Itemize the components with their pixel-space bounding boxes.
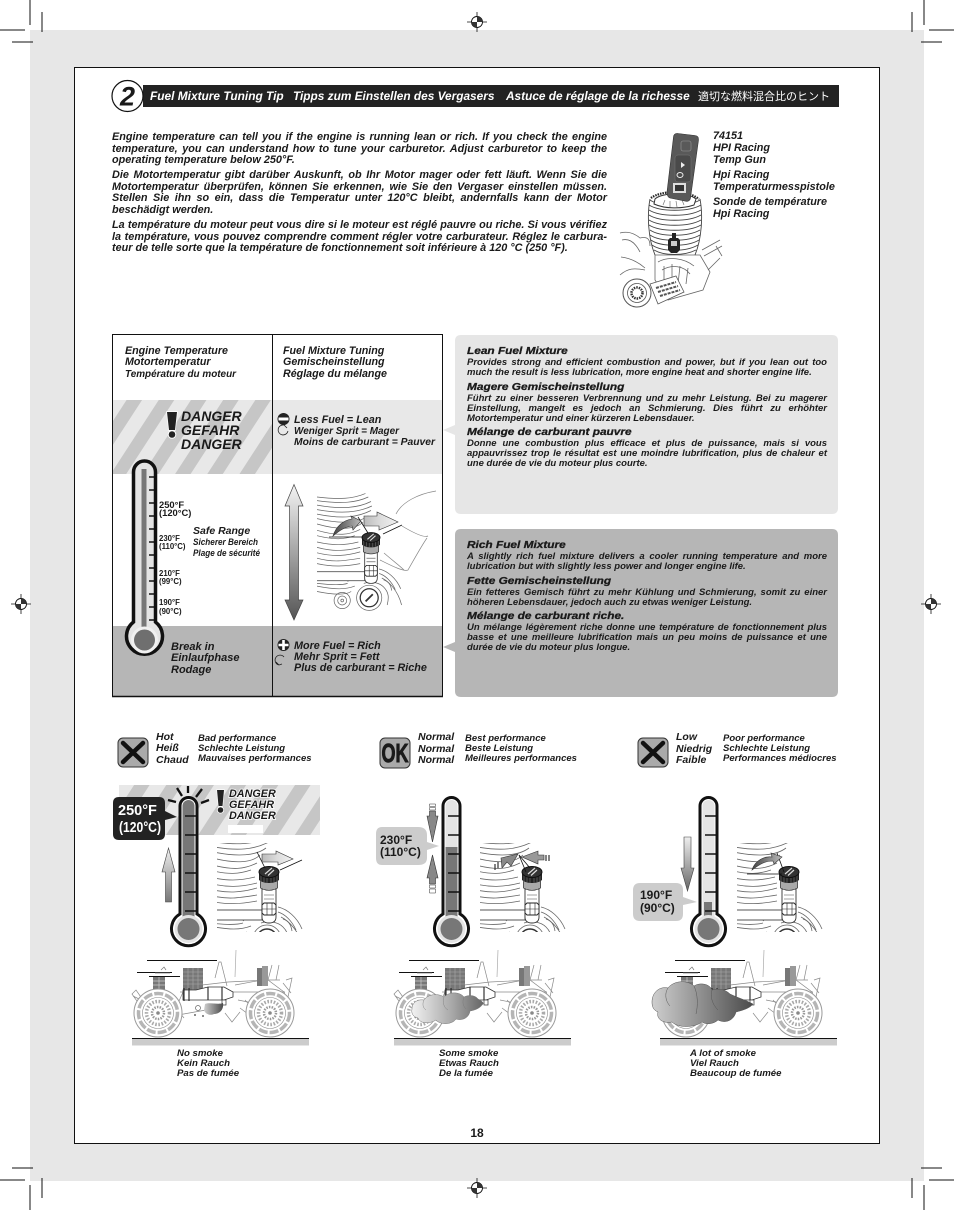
status: hot: Mauvaises performances [198,753,312,764]
smoke caption: none: No smoke [177,1048,224,1059]
temperature scale labels: 190°F [159,598,180,607]
temp gun caption: Hpi Racing [713,169,770,181]
lean text: English: Provides strong and efficient combustion and power, but if you lean out too [467,356,827,368]
status: hot: Hot [156,731,174,743]
temperature scale labels: 210°F [159,569,180,578]
danger warning: GEFAHR [181,422,240,438]
status: low: Schlechte Leistung [723,743,810,754]
carburettor hot [217,843,302,932]
status: low: Poor performance [723,733,806,744]
smoke caption: none [177,1048,240,1079]
temp gun caption [713,130,835,220]
status: hot [118,731,312,767]
status: low: Niedrig [676,743,713,755]
lean text: German: Magere Gemischeinstellung [467,382,624,393]
safe range label: Sicherer Bereich [193,537,258,548]
normal temperature callout [376,827,439,865]
lean text: German: Motortemperatur und einer kürzeren Lebensdauer. [467,412,695,424]
intro paragraph: English: Engine temperature can tell you if the engine is running lean or rich. If you check the engine [112,131,607,143]
low temperature callout [633,883,697,921]
temp gun caption: 74151 [713,130,743,142]
lean text: German [467,382,828,424]
lean text: French [467,427,828,468]
break-in label: Einlaufphase [171,652,239,664]
rich: plus icon and text: Mehr Sprit = Fett [294,651,380,663]
hot temperature callout [113,797,177,840]
danger warning: DANGER [181,436,243,452]
intro paragraph: German: Die Motortemperatur gibt darüber Auskunft, ob Ihr Motor mager oder fett läuft. Wenn Sie die [112,169,607,181]
tuning table [112,334,443,696]
status: normal: Beste Leistung [465,743,533,754]
intro paragraph: English: temperature, you can understand how to tune your carburetor. Adjust carburetor to keep the [112,143,607,155]
safe range label [193,525,261,559]
lean panel [443,335,838,514]
header bar: Fuel Mixture Tuning Tip [150,89,284,103]
smoke caption: lots [689,1048,782,1079]
danger warning [167,408,243,452]
status: low: Low [676,731,698,743]
break-in label: Break in [171,641,215,653]
rich text: English: Rich Fuel Mixture [467,540,566,551]
normal temperature callout: (110°C) [380,845,421,859]
intro paragraph: German: Stellen Sie ihn so ein, dass die Temperatur unter 120°C bleibt, andernfalls kann der Motor [112,192,607,204]
carburettor normal [480,843,566,932]
status: normal: Normal [418,731,455,743]
status: low: Performances médiocres [723,753,837,764]
hot temperature callout: 250°F [118,803,157,819]
rich: plus icon and text [275,639,427,674]
hot thermometer [168,786,209,946]
hot danger banner: DANGER [229,810,276,822]
lean text: French: appauvrissez trop le résultat est une moindre lubrification, plus de chaleur et [467,448,827,458]
lean text: French: une durée de vie du moteur plus courte. [467,458,648,468]
temperature scale labels: 250°F [159,499,184,510]
hot danger banner: GEFAHR [229,799,274,811]
table column heading: fuel mixture tuning: Réglage du mélange [283,368,387,380]
icon: cross [638,738,668,767]
truck: a lot of smoke [652,950,837,1046]
lean: minus icon and text: Moins de carburant = Pauver [294,436,436,448]
rich text: German: Fette Gemischeinstellung [467,576,611,587]
header bar: 適切な燃料混合比のヒント [698,89,830,103]
intro paragraph: French [112,219,607,254]
danger warning: DANGER [181,408,243,424]
lean text: English [467,346,827,378]
exhaust puff [204,1003,223,1015]
hot danger banner [119,785,320,835]
temp gun caption: Hpi Racing [713,208,770,220]
table column heading: fuel mixture tuning: Gemischeinstellung [283,356,385,368]
intro paragraph: French: La température du moteur peut vous dire si le moteur est réglé pauvre ou riche. Si vous vérifiez [112,219,607,231]
truck: some smoke [394,950,571,1046]
rich: plus icon and text: More Fuel = Rich [294,640,381,652]
status: low: Faible [676,754,707,766]
smoke caption: lots: Viel Rauch [690,1058,739,1069]
temperature scale labels: (120°C) [159,507,191,518]
rich text: English: A slightly rich fuel mixture delivers a cooler running temperature and more [467,550,827,562]
normal temperature callout: 230°F [380,833,412,847]
rising temperature arrow [162,848,175,902]
status: normal [380,731,577,768]
rich text: German: Ein fetteres Gemisch führt zu mehr Kühlung und Schmierung, somit zu einer [467,586,827,598]
rich text: English [466,540,827,572]
break-in label [171,641,239,676]
table column heading: fuel mixture tuning: Fuel Mixture Tuning [283,345,385,357]
double gradient arrow [285,484,303,620]
status: normal: Meilleures performances [465,753,577,764]
lean text: English: Lean Fuel Mixture [467,346,568,357]
lean text: French: Mélange de carburant pauvre [467,427,632,438]
step number badge [112,80,143,112]
intro paragraph: English: operating temperature below 250°F. [112,154,295,166]
intro paragraph: German: beschädigt werden. [112,204,213,216]
temperature scale labels: (110°C) [159,542,186,551]
lean text: German: Einstellung, mangelt es jedoch an Schmierung. Dies führt zu erhöhter [467,402,827,414]
intro paragraph: German: Motortemperatur überprüfen, können Sie erkennen, wie Sie den Vergaser einstellen müssen. [112,181,607,193]
status: normal: Best performance [465,733,546,744]
page number: 18 [470,1126,484,1140]
smoke caption: lots: A lot of smoke [689,1048,757,1059]
table column heading: engine temperature: Motortemperatur [125,356,211,368]
temperature scale labels: (99°C) [159,577,182,586]
truck: no smoke [132,950,309,1046]
step number badge: 2 [119,82,135,112]
rich: plus icon and text: Plus de carburant = Riche [294,662,427,674]
temp gun caption: Temperaturmesspistole [713,181,835,193]
engine with temp gun illustration [620,133,722,307]
rich text: French: Mélange de carburant riche. [467,611,624,622]
smoke caption: lots: Beaucoup de fumée [690,1068,782,1079]
low thermometer [692,798,726,946]
rich text: German [467,576,828,608]
falling temperature arrow [681,837,694,891]
intro paragraph: French: teur de telle sorte que la température de fonctionnement soit inférieure à 120 °C (250 °F). [112,242,568,254]
icon: ok: OK [382,738,409,768]
temp gun caption: HPI Racing [713,142,770,154]
safe range label: Safe Range [193,525,250,537]
lean text: English: much the result is less lubrication, more engine heat and shorter engine life. [467,366,812,378]
header bar: Astuce de réglage de la richesse [505,89,690,103]
rich panel [443,529,838,697]
carburettor needle illustration: main [317,491,436,610]
intro paragraph: English [112,131,607,166]
smoke caption: some: Etwas Rauch [439,1058,499,1069]
smoke caption: none: Pas de fumée [177,1068,240,1079]
temperature scale labels: 230°F [159,534,180,543]
table column heading: engine temperature: Engine Temperature [125,345,228,357]
temperature scale labels: (90°C) [159,607,182,616]
lean: minus icon and text [278,413,436,448]
lean text: German: Führt zu einer besseren Verbrennung und zu mehr Leistung. Bei zu magerer [467,392,827,404]
low temperature callout: (90°C) [640,901,675,915]
rich text: French: basse et une meilleure lubrification mais un peu moins de puissance et une [467,632,827,642]
header bar: Tipps zum Einstellen des Vergasers [293,89,495,103]
smoke caption: some: Some smoke [439,1048,499,1059]
rich text: French [467,611,827,652]
status: normal: Normal [418,743,455,755]
low temperature callout: 190°F [640,888,672,902]
normal thermometer [435,798,468,946]
converging arrows to normal [427,804,438,893]
exhaust smoke [412,993,483,1024]
table column heading: engine temperature [125,345,237,380]
smoke caption: none: Kein Rauch [177,1058,230,1069]
temp gun caption: Temp Gun [713,154,766,166]
rich text: French: durée de vie du moteur plus longue. [467,642,630,652]
status: hot: Heiß [156,742,179,754]
status: low [638,731,837,767]
table column heading: engine temperature: Température du moteur [125,369,237,380]
break-in band [113,626,442,696]
hot temperature callout: (120°C) [119,820,161,836]
status: hot: Schlechte Leistung [198,743,285,754]
temperature scale labels [159,499,191,616]
break-in label: Rodage [171,664,211,676]
smoke caption: some [439,1048,499,1079]
rich text: English: lubrication but with slightly less power and longer engine life. [467,560,746,572]
status: hot: Bad performance [198,733,277,744]
header bar [112,80,839,112]
table column heading: fuel mixture tuning [283,345,387,380]
large thermometer [126,461,163,654]
smoke caption: some: De la fumée [439,1068,494,1079]
icon: cross [118,738,148,767]
intro paragraph: German [112,169,608,216]
lean band [272,400,442,474]
intro paragraph: French: la température, vous pouvez comprendre comment régler votre carburateur. Réglez le carbura- [112,231,607,243]
rich text: German: höheren Lebensdauer, jedoch auch zu etwas weniger Leistung. [467,596,752,608]
temp gun caption: Sonde de température [713,196,827,208]
status: normal: Normal [418,754,455,766]
rich text: French: Un mélange légèrement riche donne une température de fonctionnement plus [467,622,827,632]
danger band with stripes [113,400,272,474]
lean text: French: Donne une combustion plus efficace et plus de puissance, mais si vous [467,438,827,448]
lean: minus icon and text: Weniger Sprit = Mager [294,426,400,437]
content frame [74,68,880,1144]
carburettor low [737,843,822,932]
lean: minus icon and text: Less Fuel = Lean [294,414,382,426]
status: hot: Chaud [156,754,189,766]
hot danger banner: DANGER [229,788,276,800]
safe range label: Plage de sécurité [193,548,261,559]
exhaust smoke [652,982,753,1026]
